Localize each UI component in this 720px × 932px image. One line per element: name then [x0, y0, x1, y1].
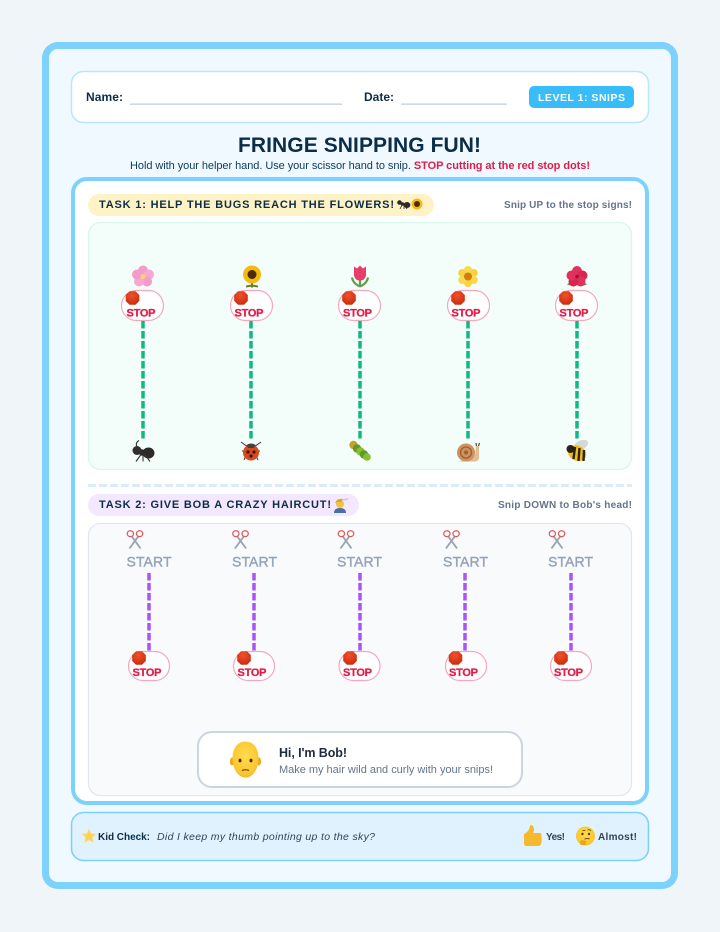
icon: sunflower: [243, 266, 261, 288]
cut line 4: snail to blossom: [448, 266, 490, 462]
task 1 cutting area: [88, 222, 632, 470]
fringe cut 5: [548, 531, 593, 680]
stop sign: [550, 651, 592, 680]
header: name, date and level: [72, 72, 648, 122]
stop sign: STOP: [452, 308, 480, 320]
stop sign: STOP: [126, 308, 156, 320]
fringe cut 4: [443, 531, 488, 680]
icon: blossom: [458, 266, 478, 287]
icon: sunflower: [412, 198, 422, 210]
icon: star: [82, 829, 96, 842]
fringe cut 1: [126, 531, 172, 680]
start label: START: [232, 554, 277, 570]
start label: START: [443, 554, 488, 570]
stop sign: [448, 290, 490, 320]
fringe cut 3: [337, 531, 382, 680]
stop sign: [556, 290, 598, 320]
kid check question: Did I keep my thumb pointing up to the sky?: [157, 831, 375, 843]
yes option: [524, 825, 565, 846]
cut line 2: ladybug to sunflower: [230, 266, 272, 460]
cut line 5: bee to hibiscus: [556, 266, 598, 464]
task 2 hint: Snip DOWN to Bob's head!: [498, 500, 632, 511]
Bob card: [198, 732, 522, 787]
task 1 hint: Snip UP to the stop signs!: [504, 200, 632, 211]
icon: scissors: [338, 531, 354, 548]
icon: scissors: [127, 531, 143, 548]
stop sign: [446, 651, 486, 680]
stop sign: STOP: [238, 667, 266, 679]
level badge: [529, 86, 634, 108]
Bob message: Make my hair wild and curly with your snips!: [279, 764, 493, 776]
stop sign: STOP: [234, 308, 264, 320]
instructions: Hold with your helper hand. Use your scissor hand to snip. STOP cutting at the red stop dots!: [130, 160, 590, 172]
cut line 1: ant to cherry blossom: [122, 266, 164, 462]
stop sign: STOP: [449, 667, 478, 679]
icon: thinking face: [576, 826, 595, 846]
level badge: LEVEL 1: SNIPS: [538, 92, 625, 104]
date field: Date:: [364, 90, 394, 104]
task 1 heading: [88, 194, 434, 216]
stop sign: STOP: [343, 308, 372, 320]
icon: haircut person: [334, 499, 348, 513]
stop sign: [128, 651, 170, 680]
icon: thumbs up: [524, 825, 542, 846]
start label: START: [126, 554, 172, 570]
stop sign: [339, 651, 380, 680]
icon: hibiscus: [566, 266, 588, 286]
icon: caterpillar: [349, 441, 371, 461]
icon: scissors: [233, 531, 248, 548]
icon: Bob's bald head: [230, 742, 261, 778]
fringe cut 2: [232, 531, 277, 680]
stop sign: [338, 290, 380, 320]
stop sign: [234, 651, 274, 680]
stop sign: [230, 290, 272, 320]
task 1 heading: TASK 1: HELP THE BUGS REACH THE FLOWERS!: [99, 199, 394, 211]
task 2 heading: TASK 2: GIVE BOB A CRAZY HAIRCUT!: [99, 499, 331, 511]
task 2 cutting area: [88, 524, 632, 796]
icon: ant: [397, 200, 410, 209]
task 2 heading: [88, 494, 359, 516]
stop sign: STOP: [132, 667, 162, 679]
yes option: Yes!: [546, 832, 565, 843]
almost option: Almost!: [598, 832, 637, 843]
cut line 3: caterpillar to tulip: [338, 266, 380, 461]
almost option: [576, 826, 637, 846]
start label: START: [337, 554, 382, 570]
stop sign: STOP: [343, 667, 372, 679]
icon: snail: [457, 443, 480, 462]
Bob greeting: Hi, I'm Bob!: [279, 746, 347, 760]
icon: cherry blossom: [132, 266, 154, 286]
icon: ant: [132, 440, 154, 462]
icon: bee: [565, 438, 590, 464]
stop sign: STOP: [560, 308, 588, 320]
start label: START: [548, 554, 593, 570]
icon: scissors: [549, 531, 565, 548]
stop sign: STOP: [554, 667, 583, 679]
stop sign: [122, 290, 164, 320]
kid check bar: [72, 812, 648, 860]
main activity panel: [73, 179, 647, 803]
icon: tulip: [352, 266, 368, 286]
icon: ladybug: [241, 442, 261, 460]
icon: scissors: [444, 531, 459, 548]
kid check label: Kid Check:: [98, 832, 150, 843]
title: FRINGE SNIPPING FUN!: [238, 134, 481, 157]
name field: Name:: [86, 90, 123, 104]
